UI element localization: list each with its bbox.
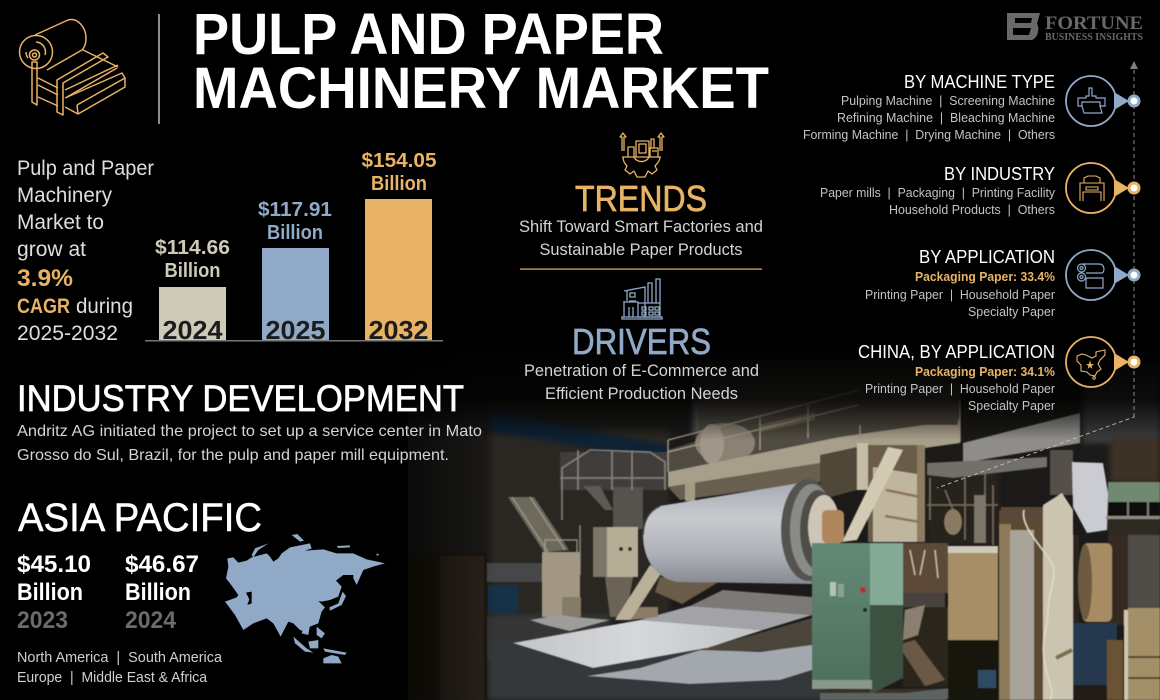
paper sheet upper xyxy=(690,590,812,615)
logo: Fortune Business Insights xyxy=(1007,13,1143,43)
text: china xyxy=(858,342,1056,413)
text: growth statement: Market to xyxy=(17,211,104,234)
bar 2032: $154.05 xyxy=(362,150,436,172)
bar chart: market size xyxy=(145,150,443,345)
icon: factory xyxy=(622,279,662,319)
paper sheet lower xyxy=(513,620,763,668)
roll frame xyxy=(655,577,717,604)
logo: Fortune Business Insights: BUSINESS INSIGHTS xyxy=(1045,32,1143,43)
text: growth statement: during xyxy=(76,295,133,318)
text: other regions xyxy=(17,650,223,686)
title: MACHINERY MARKET xyxy=(193,56,769,121)
text: china: Packaging Paper: 34.1% xyxy=(915,365,1055,379)
text: china: Specialty Paper xyxy=(968,398,1056,413)
blue tarp xyxy=(488,585,518,613)
text: china: Printing Paper | Household Paper xyxy=(865,381,1056,396)
icon: press in pin xyxy=(1066,163,1140,213)
photo: paper machine with paper roll xyxy=(400,340,1160,700)
heading: drivers: DRIVERS xyxy=(572,321,711,362)
segment: by application xyxy=(865,247,1140,319)
bottom dashed connector xyxy=(937,415,1134,488)
icon: smart factory gear xyxy=(620,133,664,177)
beige box xyxy=(948,550,998,640)
logo: Fortune Business Insights: FORTUNE xyxy=(1045,13,1143,34)
bar 2025: $117.91 xyxy=(258,199,332,221)
text: drivers description: Efficient Production Needs xyxy=(545,385,738,403)
bar 2025: Billion xyxy=(267,222,323,244)
paper scraps xyxy=(700,618,812,654)
text: machine type: Pulping Machine | Screening Machine xyxy=(841,93,1055,108)
gantry xyxy=(560,452,667,490)
text: machine type xyxy=(803,72,1055,142)
text: drivers description: Penetration of E-Commerce and xyxy=(524,362,759,380)
bar 2024: $114.66 xyxy=(155,237,230,259)
text: industry: Household Products | Others xyxy=(889,202,1055,217)
wall below platform xyxy=(820,447,857,500)
text: trends description xyxy=(519,218,763,259)
stat: 2023: $45.10 xyxy=(17,551,91,578)
text: growth statement: grow at xyxy=(17,238,86,261)
divider: trends and drivers xyxy=(520,268,762,270)
green cabinet xyxy=(812,543,870,689)
text: industry development: Grosso do Sul, Brazil, for the pulp and paper mill equipment. xyxy=(17,447,449,464)
upper platform xyxy=(668,360,960,472)
stat: 2023: Billion xyxy=(17,579,83,606)
stat: 2024: $46.67 xyxy=(125,551,199,578)
stairs xyxy=(508,497,569,552)
text: drivers description xyxy=(524,362,759,403)
icon: china map in pin xyxy=(1066,337,1140,387)
text: machine type: Forming Machine | Drying Machine | Others xyxy=(803,127,1055,142)
bar 2024: 2024 xyxy=(162,315,223,345)
title xyxy=(193,2,769,121)
beige post and truss xyxy=(868,445,923,542)
text: application xyxy=(865,247,1056,319)
bar 2032 xyxy=(362,150,436,345)
dark column on the left xyxy=(407,553,487,700)
text: industry development: Andritz AG initiated the project to set up a service center in Mato xyxy=(17,423,482,440)
text: application: BY APPLICATION xyxy=(919,247,1055,267)
stat: 2024: 2024 xyxy=(125,607,177,634)
pipe xyxy=(487,563,545,582)
stat: 2024 xyxy=(125,551,199,634)
text: growth statement: Machinery xyxy=(17,184,112,207)
floor right xyxy=(820,688,970,700)
icon: paper rolls in pin xyxy=(1066,250,1140,300)
text: industry xyxy=(820,164,1055,217)
text: growth statement: CAGR xyxy=(17,295,70,318)
heading: trends: TRENDS xyxy=(575,178,707,219)
brown frame beside cabinet xyxy=(903,543,948,593)
segment: china by application xyxy=(858,337,1140,413)
text: application: Packaging Paper: 33.4% xyxy=(915,270,1055,284)
text: china: CHINA, BY APPLICATION xyxy=(858,342,1055,362)
segment: by machine type xyxy=(803,72,1140,142)
text: growth statement: Pulp and Paper xyxy=(17,157,154,180)
text: growth statement: 2025-2032 xyxy=(17,322,118,345)
stat: 2023 xyxy=(17,551,91,634)
bar 2024: Billion xyxy=(164,260,220,282)
text: application: Specialty Paper xyxy=(968,304,1056,319)
heading: industry development: INDUSTRY DEVELOPMENT xyxy=(17,378,464,419)
right wheel housing xyxy=(1108,535,1128,625)
right boxes xyxy=(1107,640,1123,700)
bar 2025 xyxy=(258,199,332,345)
map: asia pacific xyxy=(225,534,385,663)
text: application: Printing Paper | Household Paper xyxy=(865,287,1056,302)
text: industry: Paper mills | Packaging | Printing Facility xyxy=(820,185,1055,200)
right white cloth xyxy=(1072,462,1108,533)
bar 2024 xyxy=(155,237,230,345)
text: growth statement xyxy=(17,157,154,345)
text: trends description: Shift Toward Smart Factories and xyxy=(519,218,763,236)
text: machine type: BY MACHINE TYPE xyxy=(904,72,1055,92)
heading: asia pacific: ASIA PACIFIC xyxy=(18,496,262,540)
bar 2032: 2032 xyxy=(368,315,428,345)
icon: machine in pin xyxy=(1066,76,1140,126)
text: industry: BY INDUSTRY xyxy=(944,164,1055,184)
divider: header xyxy=(158,14,160,124)
title: PULP AND PAPER xyxy=(193,2,664,67)
stat: 2023: 2023 xyxy=(17,607,68,634)
overhead ducts xyxy=(963,413,1080,463)
machinery right of post xyxy=(927,470,998,545)
paper roll xyxy=(643,483,812,584)
text: trends description: Sustainable Paper Products xyxy=(540,241,742,259)
blue fabric xyxy=(1073,623,1117,685)
white electrical box xyxy=(593,527,607,577)
segment: by industry xyxy=(820,163,1140,217)
bar 2025: 2025 xyxy=(266,315,326,345)
text: growth statement: 3.9% xyxy=(17,265,73,292)
icon: paper roll machine xyxy=(20,19,125,115)
text: industry development xyxy=(17,423,482,464)
timeline: dashed line and arrow xyxy=(1130,61,1138,415)
beige block xyxy=(542,552,580,617)
fade overlays xyxy=(407,340,1160,440)
tall pillar xyxy=(999,510,1045,700)
text: other regions: North America | South America xyxy=(17,650,223,666)
bar 2032: Billion xyxy=(371,173,427,195)
text: other regions: Europe | Middle East & Africa xyxy=(17,670,208,686)
text: machine type: Refining Machine | Bleaching Machine xyxy=(837,110,1055,125)
stat: 2024: Billion xyxy=(125,579,191,606)
